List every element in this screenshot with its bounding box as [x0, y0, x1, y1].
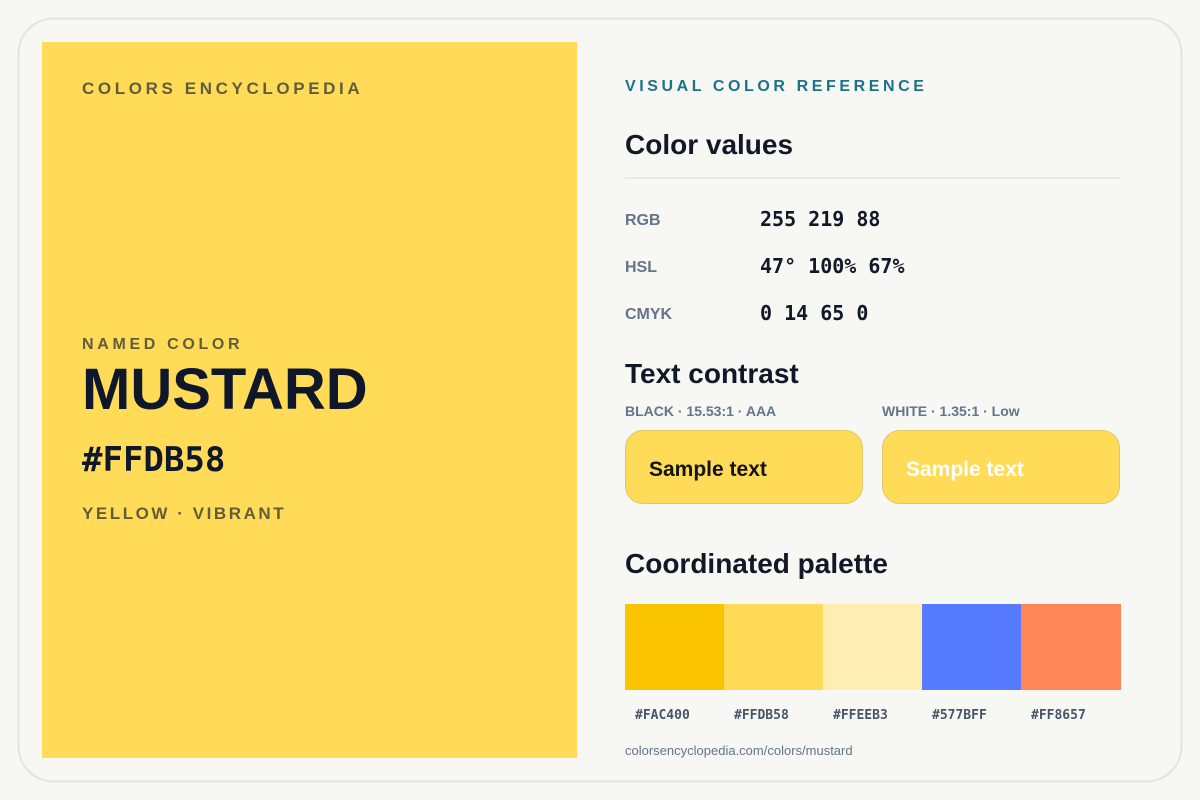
caption: white contrast: WHITE · 1.35:1 · Low — [882, 403, 1020, 419]
swatch label FFDB58: #FFDB58 — [734, 708, 789, 723]
sample: black text — [625, 430, 863, 504]
row: HSL — [625, 254, 904, 278]
swatch 577BFF — [922, 604, 1021, 690]
source url: colorsencyclopedia.com/colors/mustard — [625, 743, 853, 758]
caption: black contrast: BLACK · 15.53:1 · AAA — [625, 403, 776, 419]
swatch label 577BFF: #577BFF — [932, 708, 987, 723]
divider — [625, 177, 1120, 179]
white sample text: Sample text — [906, 458, 1024, 480]
RGB label: RGB — [625, 212, 661, 229]
color name: MUSTARD — [82, 357, 368, 422]
eyebrow: named color: NAMED COLOR — [82, 336, 243, 353]
palette swatches — [625, 604, 1121, 690]
row: RGB — [625, 207, 880, 231]
eyebrow: visual color reference: VISUAL COLOR REFERENCE — [625, 78, 928, 95]
brand label: COLORS ENCYCLOPEDIA — [82, 79, 363, 98]
hex value: #FFDB58 — [82, 440, 225, 480]
sample: white text — [882, 430, 1120, 504]
CMYK value: 0 14 65 0 — [760, 301, 868, 325]
swatch label FAC400: #FAC400 — [635, 708, 690, 723]
heading: text contrast: Text contrast — [625, 358, 799, 389]
swatch label FFEEB3: #FFEEB3 — [833, 708, 888, 723]
RGB value: 255 219 88 — [760, 207, 880, 231]
swatch FF8657 — [1021, 604, 1121, 690]
HSL label: HSL — [625, 259, 657, 276]
row: CMYK — [625, 301, 868, 325]
swatch FFEEB3 — [823, 604, 922, 690]
color tags: YELLOW · VIBRANT — [82, 504, 286, 523]
swatch label FF8657: #FF8657 — [1031, 708, 1086, 723]
heading: color values: Color values — [625, 129, 793, 160]
black sample text: Sample text — [649, 458, 767, 480]
CMYK label: CMYK — [625, 306, 672, 323]
swatch FAC400 — [625, 604, 724, 690]
heading: coordinated palette: Coordinated palette — [625, 548, 888, 579]
panel: color hero — [42, 42, 577, 758]
HSL value: 47° 100% 67% — [760, 254, 904, 278]
swatch FFDB58 — [724, 604, 823, 690]
